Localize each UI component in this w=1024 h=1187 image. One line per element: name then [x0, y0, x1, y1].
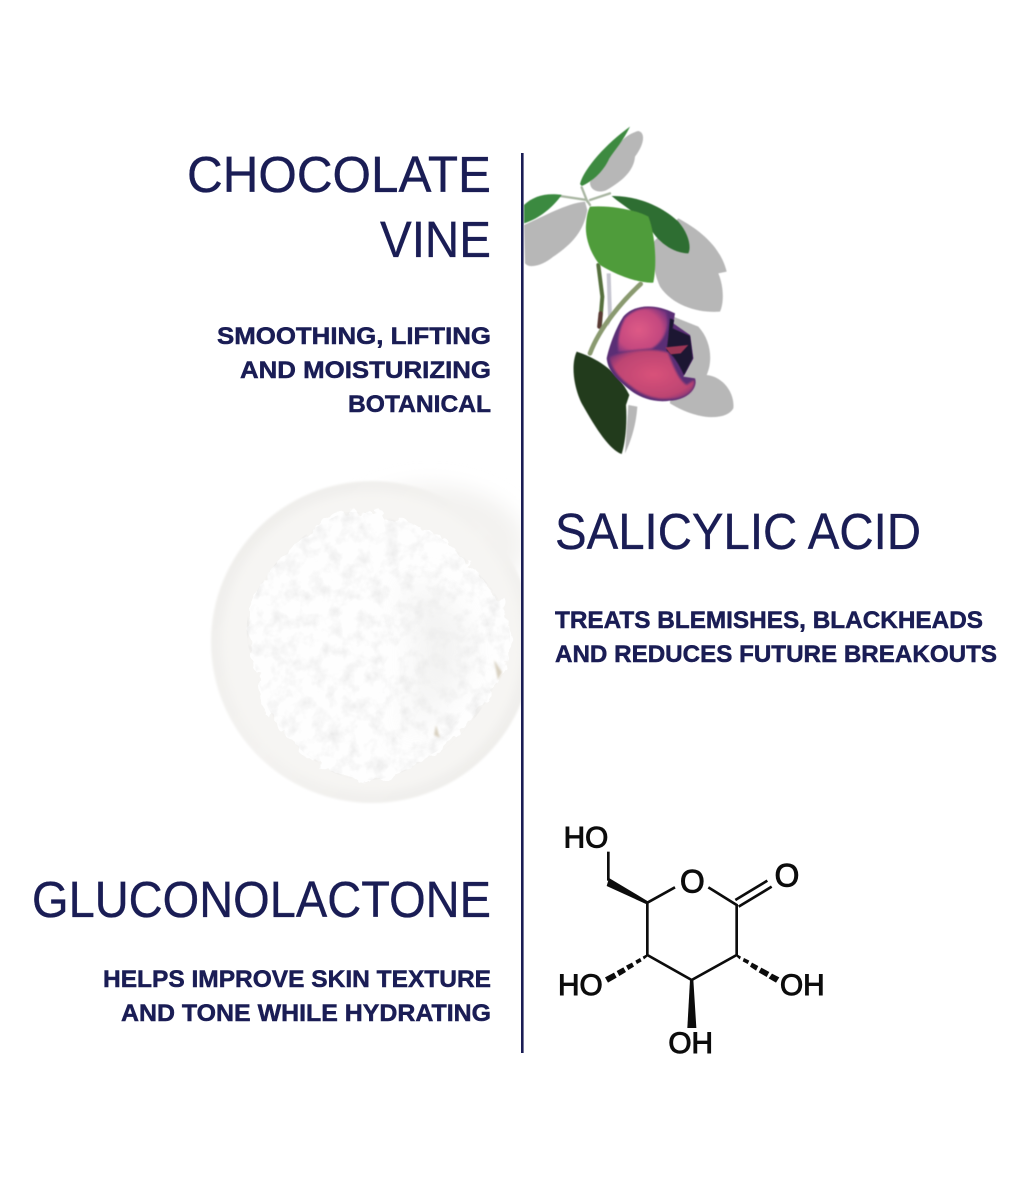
molecule atom labels [558, 822, 825, 1060]
molecule atom labels: O [775, 857, 799, 893]
molecule bonds [608, 852, 772, 980]
text: Gluconolactone description: AND TONE WHILE HYDRATING [121, 1000, 491, 1027]
plant stems [560, 187, 641, 353]
vertical divider [521, 153, 524, 1053]
image: chocolate vine plant [524, 127, 733, 454]
molecule atom labels: OH [780, 969, 825, 1002]
image: white powder in bowl [211, 481, 533, 803]
heading: Chocolate Vine: VINE [380, 211, 491, 268]
text: Salicylic Acid description: TREATS BLEMISHES, BLACKHEADS [555, 607, 983, 634]
heading: Chocolate Vine [187, 146, 491, 268]
text: Salicylic Acid description [555, 607, 997, 668]
molecule atom labels: HO [564, 822, 608, 855]
diagram: gluconolactone molecule [558, 822, 825, 1060]
text: Gluconolactone description [103, 966, 491, 1027]
molecule atom labels: O [680, 864, 705, 900]
text: Chocolate Vine description: BOTANICAL [348, 391, 491, 418]
text: Salicylic Acid description: AND REDUCES FUTURE BREAKOUTS [555, 641, 997, 668]
heading: Chocolate Vine: CHOCOLATE [187, 146, 491, 203]
plant cast shadows [524, 131, 733, 453]
molecule atom labels: HO [558, 969, 603, 1002]
plant leaves [524, 127, 690, 454]
molecule wedges [605, 878, 779, 1028]
heading: Gluconolactone: GLUCONOLACTONE [32, 871, 491, 928]
text: Chocolate Vine description: SMOOTHING, LIFTING [217, 323, 491, 350]
plant flower [607, 306, 696, 401]
text: Gluconolactone description: HELPS IMPROVE SKIN TEXTURE [103, 966, 491, 993]
text: Chocolate Vine description [217, 323, 491, 418]
text: Chocolate Vine description: AND MOISTURIZING [240, 357, 491, 384]
molecule atom labels: OH [668, 1027, 713, 1060]
heading: Salicylic Acid: SALICYLIC ACID [555, 503, 921, 560]
